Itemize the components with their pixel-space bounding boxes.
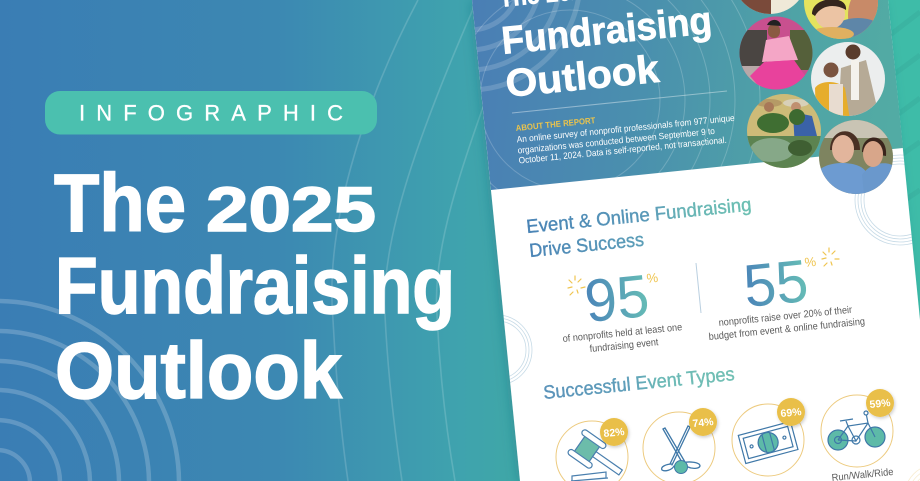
- stat divider: [696, 263, 701, 313]
- stat: 95 percent: %: [646, 270, 659, 286]
- caption 95: fundraising event: [589, 337, 659, 355]
- section heading: successful event types: Successful Event Types: [542, 364, 736, 404]
- event type: auction: [556, 418, 629, 481]
- caption 55: [708, 305, 866, 343]
- photo: couple: [810, 40, 886, 120]
- about the report: [515, 113, 735, 165]
- about the report: organizations was conducted between September 9 to: [517, 126, 715, 155]
- background thin arcs: [332, 0, 500, 481]
- badge 82: 82%: [603, 426, 626, 440]
- badge 69: 69%: [780, 406, 803, 420]
- about the report: ABOUT THE REPORT: [515, 115, 597, 133]
- badge 74: 74%: [692, 416, 715, 430]
- page title: [498, 0, 714, 106]
- pill label: infographic: INFOGRAPHIC: [79, 100, 343, 126]
- photo: woman in pink: [740, 16, 812, 90]
- page white sheet: [472, 0, 920, 481]
- icon: gavel: [567, 429, 629, 481]
- event type: cash: [732, 398, 805, 476]
- stat: 55 percent: [708, 247, 866, 343]
- stat: 55 percent: 55: [741, 247, 811, 320]
- photo: child and woman: [804, 0, 878, 39]
- section heading: event and online fundraising: [525, 195, 752, 262]
- main title: Fundraising: [55, 241, 455, 330]
- caption 95: of nonprofits held at least one: [562, 322, 683, 345]
- stat: 95 percent: 95: [582, 262, 652, 335]
- icon: sparkle left: [568, 276, 585, 295]
- event type: run walk ride: [821, 389, 894, 481]
- stat: 95 percent: [562, 262, 683, 355]
- background rings lower left: [0, 301, 179, 481]
- about the report: October 11, 2024. Data is self-reported, not transactional.: [518, 135, 727, 165]
- section heading: event and online fundraising: Event & Online Fundraising: [525, 195, 752, 238]
- main title: 2025: [206, 175, 376, 245]
- main title: [54, 158, 455, 415]
- section heading: event and online fundraising: Drive Success: [528, 230, 645, 262]
- icon: bicycle: [828, 411, 885, 450]
- about the report: An online survey of nonprofit professionals from 977 unique: [516, 113, 735, 144]
- caption 95: [562, 322, 683, 355]
- photo: two women in blue: [818, 120, 896, 194]
- report page: [468, 0, 920, 481]
- pill label: infographic: [45, 91, 377, 134]
- photo: top left cropped: [741, 0, 799, 14]
- icon: banknote: [738, 421, 798, 463]
- corner rings on page: [462, 155, 920, 481]
- main title: The: [54, 158, 186, 249]
- icon: sparkle right: [822, 248, 839, 266]
- icon: golf clubs: [662, 426, 700, 471]
- stat: 55 percent: %: [804, 254, 817, 270]
- background stripes on right: [890, 12, 920, 200]
- page title: Outlook: [504, 48, 661, 106]
- main title: Outlook: [55, 326, 342, 415]
- badge 59: 59%: [869, 397, 892, 411]
- photo: gardeners: [746, 93, 822, 172]
- event type: golf: [643, 408, 717, 481]
- caption 55: budget from event & online fundraising: [708, 316, 866, 343]
- page header band: [472, 0, 903, 190]
- header divider: [512, 91, 727, 113]
- caption 55: nonprofits raise over 20% of their: [718, 305, 853, 329]
